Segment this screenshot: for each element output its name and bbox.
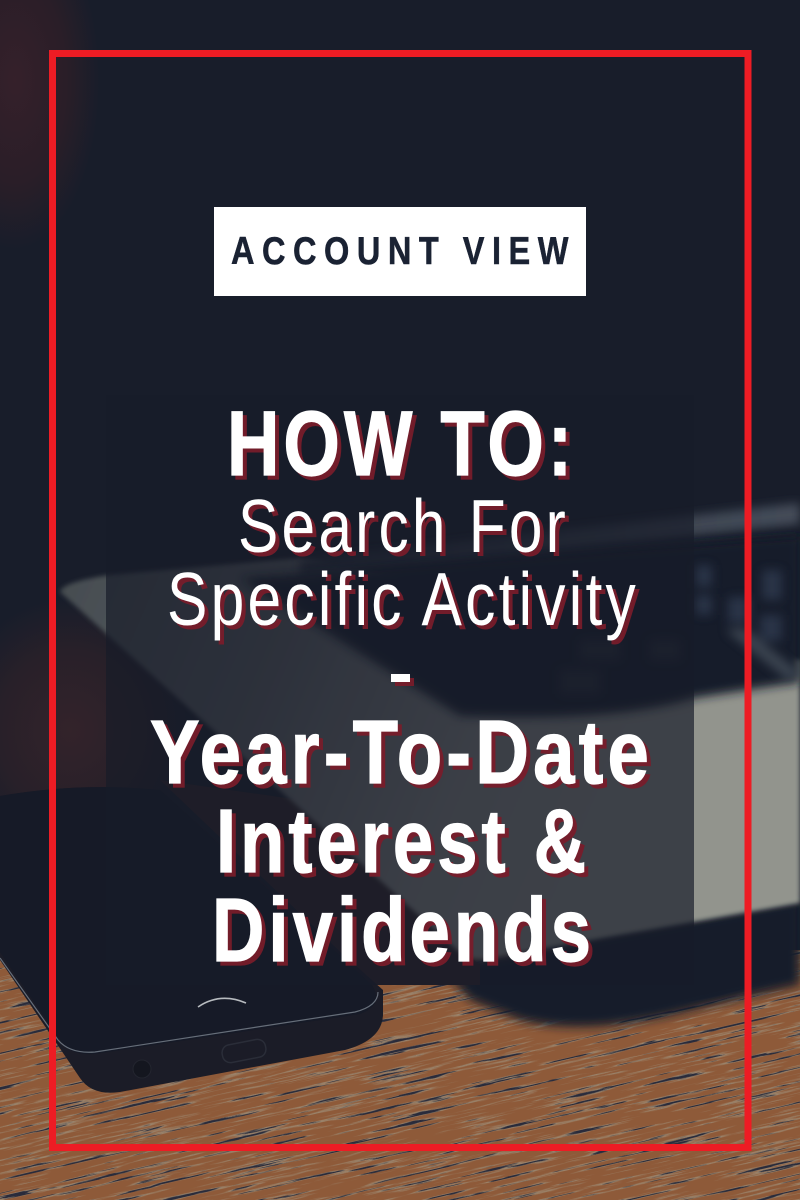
headline text — [150, 393, 653, 981]
heading: Interest &: Interest & — [216, 792, 590, 892]
wedge between phone and laptop — [160, 780, 480, 985]
heading: Year-To-Date: Year-To-Date — [150, 703, 653, 803]
phone — [0, 787, 383, 1093]
laptop — [60, 503, 800, 1027]
home button — [198, 998, 246, 1007]
keyboard keys — [560, 565, 800, 694]
keyboard well — [240, 536, 800, 717]
label badge: ACCOUNT VIEW: ACCOUNT VIEW — [231, 230, 576, 273]
subheading line 1: Search For — [238, 484, 569, 568]
heading: HOW TO: HOW TO: — [227, 393, 576, 495]
wooden desk — [0, 950, 800, 1200]
red frame — [52, 54, 748, 1148]
red glow at top left — [0, 0, 100, 250]
dark translucent text panel — [106, 395, 694, 985]
phone front face — [0, 787, 376, 1054]
phone edge highlight — [0, 958, 378, 1052]
silver deck — [60, 558, 800, 959]
headphone jack — [133, 1060, 151, 1078]
phone body side — [0, 787, 383, 1093]
subheading line 2: Specific Activity — [167, 557, 639, 641]
heading: Dividends: Dividends — [212, 881, 595, 981]
red-brown table edge at left — [0, 600, 190, 810]
laptop shadow on desk — [440, 900, 800, 1027]
separator dash — [391, 674, 410, 682]
label badge: ACCOUNT VIEW — [214, 207, 586, 296]
charging port — [221, 1038, 267, 1064]
screen edge — [300, 503, 800, 578]
